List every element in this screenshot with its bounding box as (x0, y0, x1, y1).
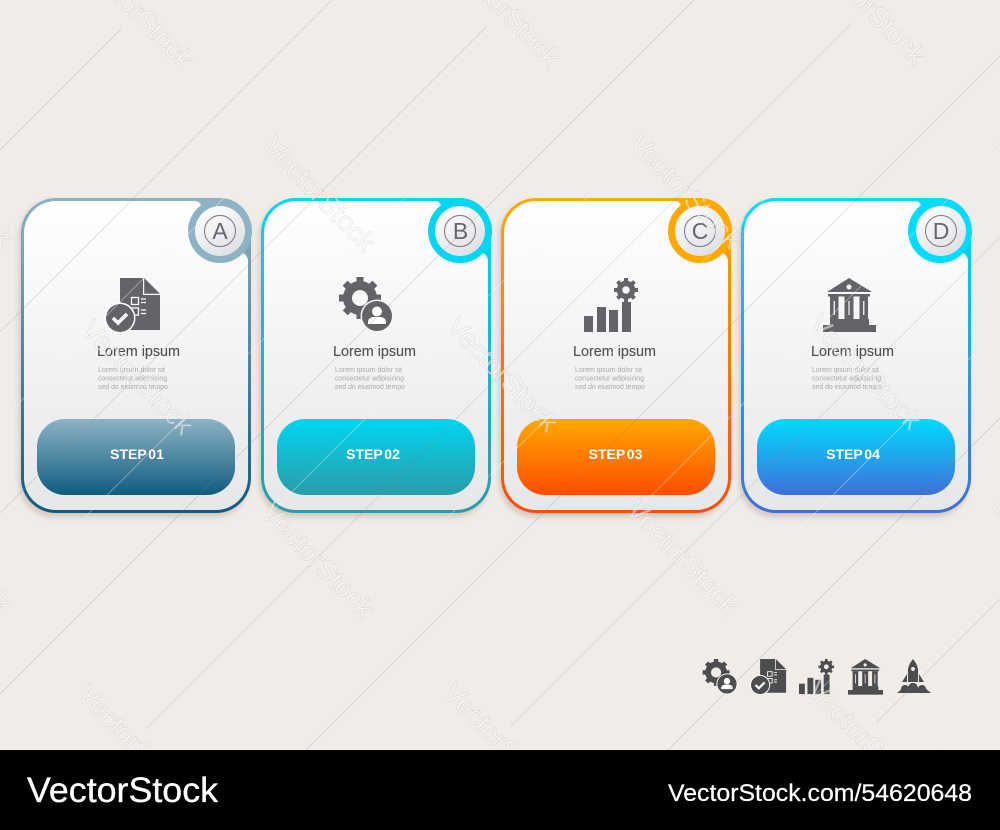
panel: step D card (741, 198, 972, 513)
card frame A (21, 198, 251, 513)
description C: consectetur adipisicing (575, 376, 644, 382)
icon: gear with person (339, 277, 394, 332)
icon: small document (750, 659, 786, 695)
icon: small gear with person (703, 659, 738, 695)
description D: sed do eiusmod tempo (812, 384, 882, 391)
badge B (428, 199, 492, 263)
step button A (37, 419, 235, 495)
watermarks: VectorStock (804, 309, 928, 436)
step button D: STEP 04 (826, 446, 880, 462)
description D: Lorem ipsum dolor sit (812, 367, 879, 374)
heading C: Lorem ipsum (573, 344, 656, 360)
watermarks: VectorStock (72, 679, 196, 806)
description D: consectetur adipisicing (812, 376, 881, 382)
card body C (504, 201, 728, 510)
card frame D (741, 198, 971, 513)
footer url: VectorStock.com/54620648 (668, 780, 972, 807)
watermarks: VectorStock (438, 677, 562, 804)
watermarks: VectorStock (256, 497, 380, 624)
badge C: C (692, 218, 708, 244)
step button B (277, 419, 475, 495)
description D (812, 367, 882, 391)
watermarks: VectorStock (802, 674, 926, 801)
badge B: B (453, 218, 468, 244)
watermarks: VectorStock (258, 131, 382, 258)
panel: step A card (21, 198, 252, 513)
watermarks: VectorStock (624, 128, 748, 255)
card body B (264, 201, 488, 510)
watermarks: VectorStock (621, 494, 745, 621)
description B: Lorem ipsum dolor sit (335, 367, 402, 374)
card frame C (501, 198, 731, 513)
panel: step B card (261, 198, 492, 513)
description B (335, 367, 405, 391)
step button A: STEP 01 (110, 446, 164, 462)
step button C: STEP 03 (589, 446, 643, 462)
footer logo: VectorStock (27, 770, 218, 810)
icon: rocket (897, 659, 931, 693)
badge C (668, 199, 732, 263)
description B: consectetur adipisicing (335, 376, 404, 382)
heading B: Lorem ipsum (333, 344, 416, 360)
icon row (703, 659, 931, 695)
icon: bars with gear (584, 278, 638, 332)
description A: consectetur adipisicing (98, 376, 167, 382)
step button C (517, 419, 715, 495)
panel: step C card (501, 198, 732, 513)
description C: sed do eiusmod tempo (575, 384, 645, 391)
watermarks: VectorStock (441, 311, 565, 438)
step button B: STEP 02 (346, 446, 400, 462)
description A (98, 367, 168, 391)
footer bar (0, 750, 1000, 830)
watermarks: VectorStock (76, 314, 200, 441)
description A: sed do eiusmod tempo (98, 384, 168, 391)
icon: small bars with gear (799, 659, 834, 694)
description A: Lorem ipsum dolor sit (98, 367, 165, 374)
card body A (24, 201, 248, 510)
description C: Lorem ipsum dolor sit (575, 367, 642, 374)
badge D: D (933, 218, 949, 244)
description B: sed do eiusmod tempo (335, 384, 405, 391)
icon: document with check (104, 278, 160, 334)
heading D: Lorem ipsum (811, 344, 894, 360)
card body D (744, 201, 968, 510)
heading A: Lorem ipsum (97, 344, 180, 360)
badge D (908, 199, 972, 263)
card frame B (261, 198, 491, 513)
description C (575, 367, 645, 391)
badge A: A (212, 218, 228, 244)
step button D (757, 419, 955, 495)
icon: bank building (823, 278, 876, 332)
icon: small bank (848, 659, 883, 695)
badge A (188, 199, 252, 263)
